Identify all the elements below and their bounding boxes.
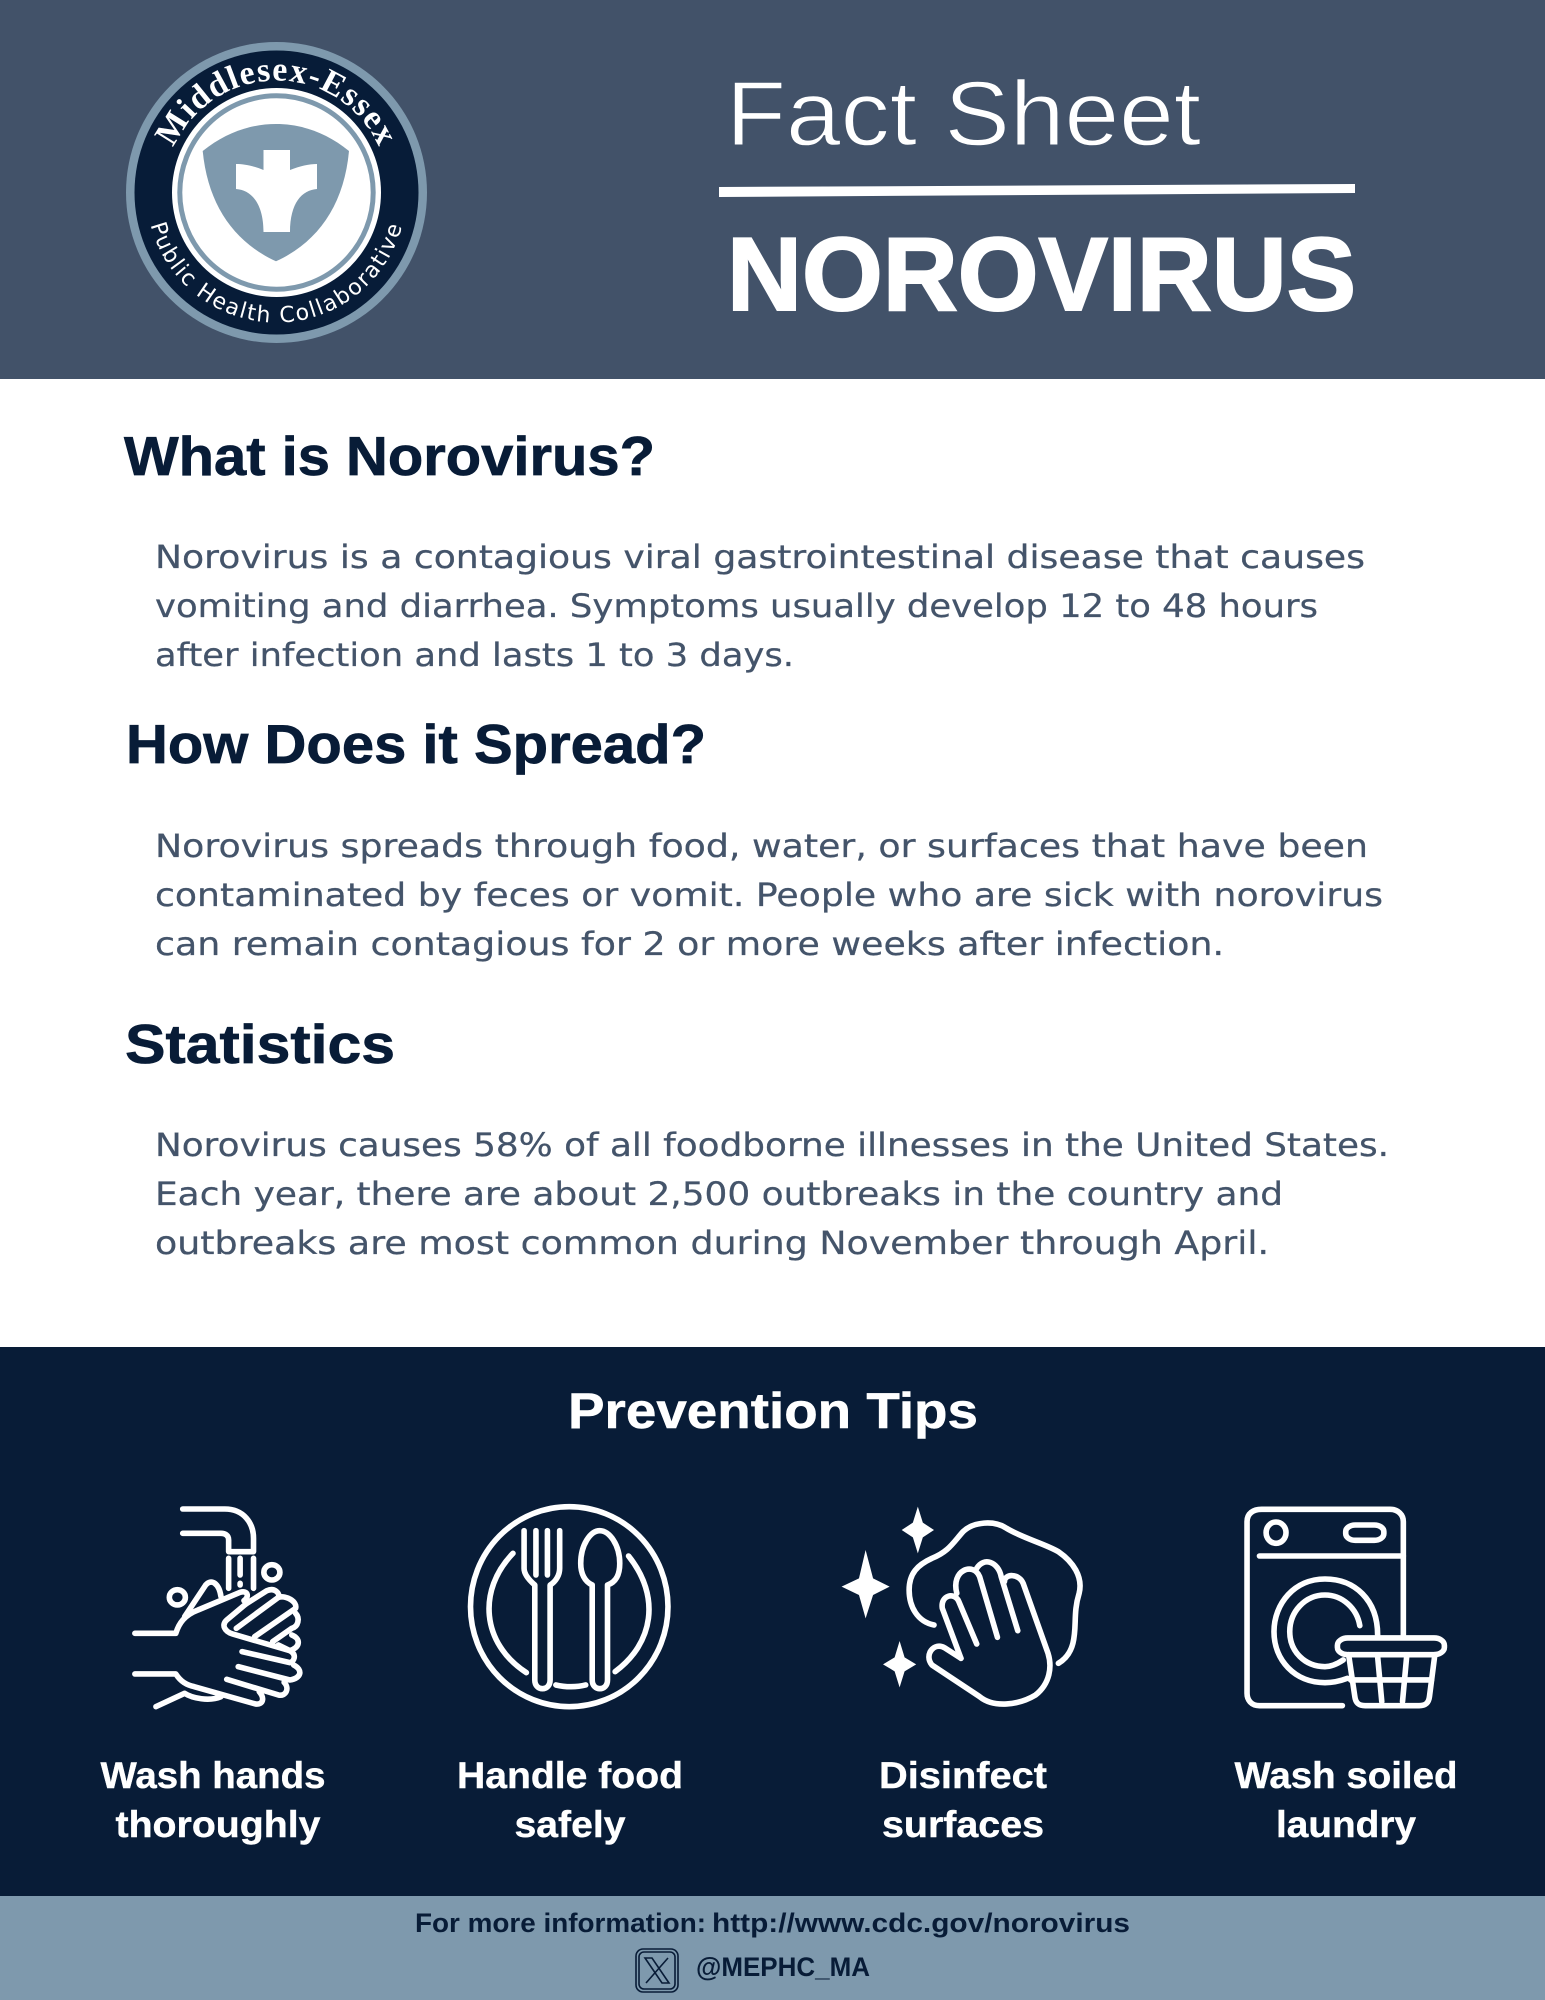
- paragraph: Norovirus spreads through food, water, or surfaces that have been: [155, 827, 1368, 865]
- paragraph: vomiting and diarrhea. Symptoms usually develop 12 to 48 hours: [155, 587, 1318, 625]
- section: Statistics: [125, 1013, 1389, 1262]
- paragraph: [155, 1126, 1389, 1262]
- logo: Middlesex-Essex Public Health Collaborative: [126, 42, 427, 343]
- title: Fact Sheet: Fact Sheet: [726, 63, 1201, 165]
- heading: Prevention Tips: Prevention Tips: [568, 1383, 978, 1439]
- label: wash hands: thoroughly: [116, 1804, 321, 1845]
- heading: What is Norovirus?: [124, 425, 655, 487]
- paragraph: Norovirus is a contagious viral gastrointestinal disease that causes: [155, 538, 1365, 576]
- logo: bottom arc text: Public Health Collaborative: [151, 222, 402, 322]
- label: wash hands: Wash hands: [100, 1755, 326, 1796]
- label: wash soiled laundry: Wash soiled: [1234, 1755, 1458, 1796]
- sparkles: [842, 1507, 934, 1687]
- icon: hand wiping surface with sparkles: [842, 1507, 1080, 1704]
- paragraph: [155, 538, 1365, 674]
- icon: X social: [636, 1949, 678, 1992]
- label: wash soiled laundry: laundry: [1276, 1804, 1416, 1845]
- title: NOROVIRUS: NOROVIRUS: [727, 217, 1356, 333]
- paragraph: contaminated by feces or vomit. People who are sick with norovirus: [155, 876, 1383, 914]
- paragraph: can remain contagious for 2 or more weeks after infection.: [155, 925, 1224, 963]
- panel: footer: [0, 1896, 1545, 2000]
- paragraph: after infection and lasts 1 to 3 days.: [155, 636, 794, 674]
- label: wash hands: [100, 1755, 326, 1845]
- footer link text: http://www.cdc.gov/norovirus: [712, 1908, 1130, 1938]
- paragraph: [155, 827, 1383, 963]
- paragraph: Each year, there are about 2,500 outbreaks in the country and: [155, 1175, 1283, 1213]
- cloth and hand: [909, 1523, 1080, 1704]
- paragraph: outbreaks are most common during November through April.: [155, 1224, 1269, 1262]
- footer handle: @MEPHC_MA: [696, 1952, 870, 1982]
- label: handle food: [457, 1755, 683, 1845]
- label: disinfect surfaces: surfaces: [882, 1804, 1044, 1845]
- label: handle food: Handle food: [457, 1755, 683, 1796]
- footer link text: [415, 1908, 1130, 1938]
- label: disinfect surfaces: Disinfect: [879, 1755, 1047, 1796]
- section: How Does it Spread: [126, 713, 1383, 963]
- paragraph: Norovirus causes 58% of all foodborne illnesses in the United States.: [155, 1126, 1389, 1164]
- footer link text: For more information:: [415, 1908, 706, 1938]
- heading: How Does it Spread?: [126, 713, 706, 775]
- logo: shield with cross: [203, 124, 349, 261]
- icon: plate with fork and spoon: [471, 1507, 668, 1707]
- heading: Statistics: [125, 1013, 395, 1075]
- icon: washing hands: [135, 1509, 300, 1707]
- panel: prevention tips: [0, 1347, 1545, 1896]
- title underline: [719, 184, 1355, 197]
- label: disinfect surfaces: [879, 1755, 1047, 1845]
- logo: top arc text: Middlesex-Essex: [154, 64, 392, 147]
- icon: washing machine with laundry basket: [1247, 1509, 1444, 1706]
- panel: header band: [0, 0, 1545, 379]
- label: handle food: safely: [514, 1804, 626, 1845]
- label: wash soiled laundry: [1234, 1755, 1458, 1845]
- section: What is Norovirus: [124, 425, 1365, 674]
